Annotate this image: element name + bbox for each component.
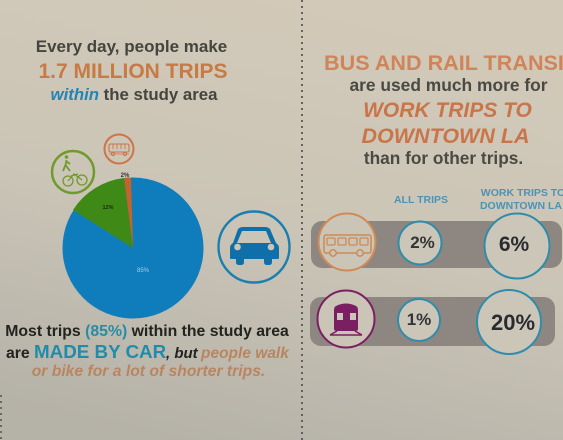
heading: bus and rail transit xyxy=(324,50,563,168)
pie chart: mode share xyxy=(62,173,204,318)
column labels: DOWNTOWN LA xyxy=(480,200,562,212)
caption: most trips by car: or bike for a lot of shorter trips. xyxy=(32,363,265,380)
row: rail xyxy=(310,290,555,354)
icon: car xyxy=(218,212,290,282)
caption: most trips by car: are xyxy=(6,345,30,362)
value: bus all trips: 2% xyxy=(410,233,435,252)
value: rail all trips xyxy=(398,299,440,341)
icon: bus xyxy=(318,214,376,270)
icon: transit bus xyxy=(104,134,134,164)
value: bus work trips: 6% xyxy=(499,233,529,256)
heading: bus and rail transit: DOWNTOWN LA xyxy=(362,124,530,148)
caption: most trips by car: Most trips (85%) within the study area xyxy=(5,323,289,340)
heading: daily trips xyxy=(36,37,228,104)
heading: daily trips: 1.7 MILLION TRIPS xyxy=(38,60,228,83)
heading: daily trips: Every day, people make xyxy=(36,37,227,56)
value: bus work trips xyxy=(484,214,550,278)
column labels: ALL TRIPS xyxy=(394,194,448,206)
value: rail all trips: 1% xyxy=(407,310,431,329)
column labels xyxy=(394,187,563,212)
value: bus all trips xyxy=(398,222,442,264)
heading: daily trips: within the study area xyxy=(51,85,218,104)
caption: most trips by car: , but xyxy=(165,345,199,362)
pie chart: mode share: 12% xyxy=(102,205,114,211)
pie chart: mode share: 2% xyxy=(121,173,130,179)
caption: most trips by car: people walk xyxy=(200,345,290,362)
heading: bus and rail transit: are used much more for xyxy=(349,75,548,95)
value: rail work trips xyxy=(477,290,541,354)
caption: most trips by car xyxy=(5,323,290,380)
caption: most trips by car: MADE BY CAR xyxy=(34,341,167,362)
heading: bus and rail transit: BUS AND RAIL TRANSI xyxy=(324,50,563,75)
row: bus xyxy=(311,214,562,278)
icon: train xyxy=(318,290,374,348)
icon: walk and bike xyxy=(52,151,94,193)
value: rail work trips: 20% xyxy=(491,310,535,335)
pie chart: mode share: 85% xyxy=(137,268,150,274)
heading: bus and rail transit: than for other trips. xyxy=(364,148,523,168)
column labels: WORK TRIPS TO xyxy=(481,187,563,199)
heading: bus and rail transit: WORK TRIPS TO xyxy=(363,99,532,122)
